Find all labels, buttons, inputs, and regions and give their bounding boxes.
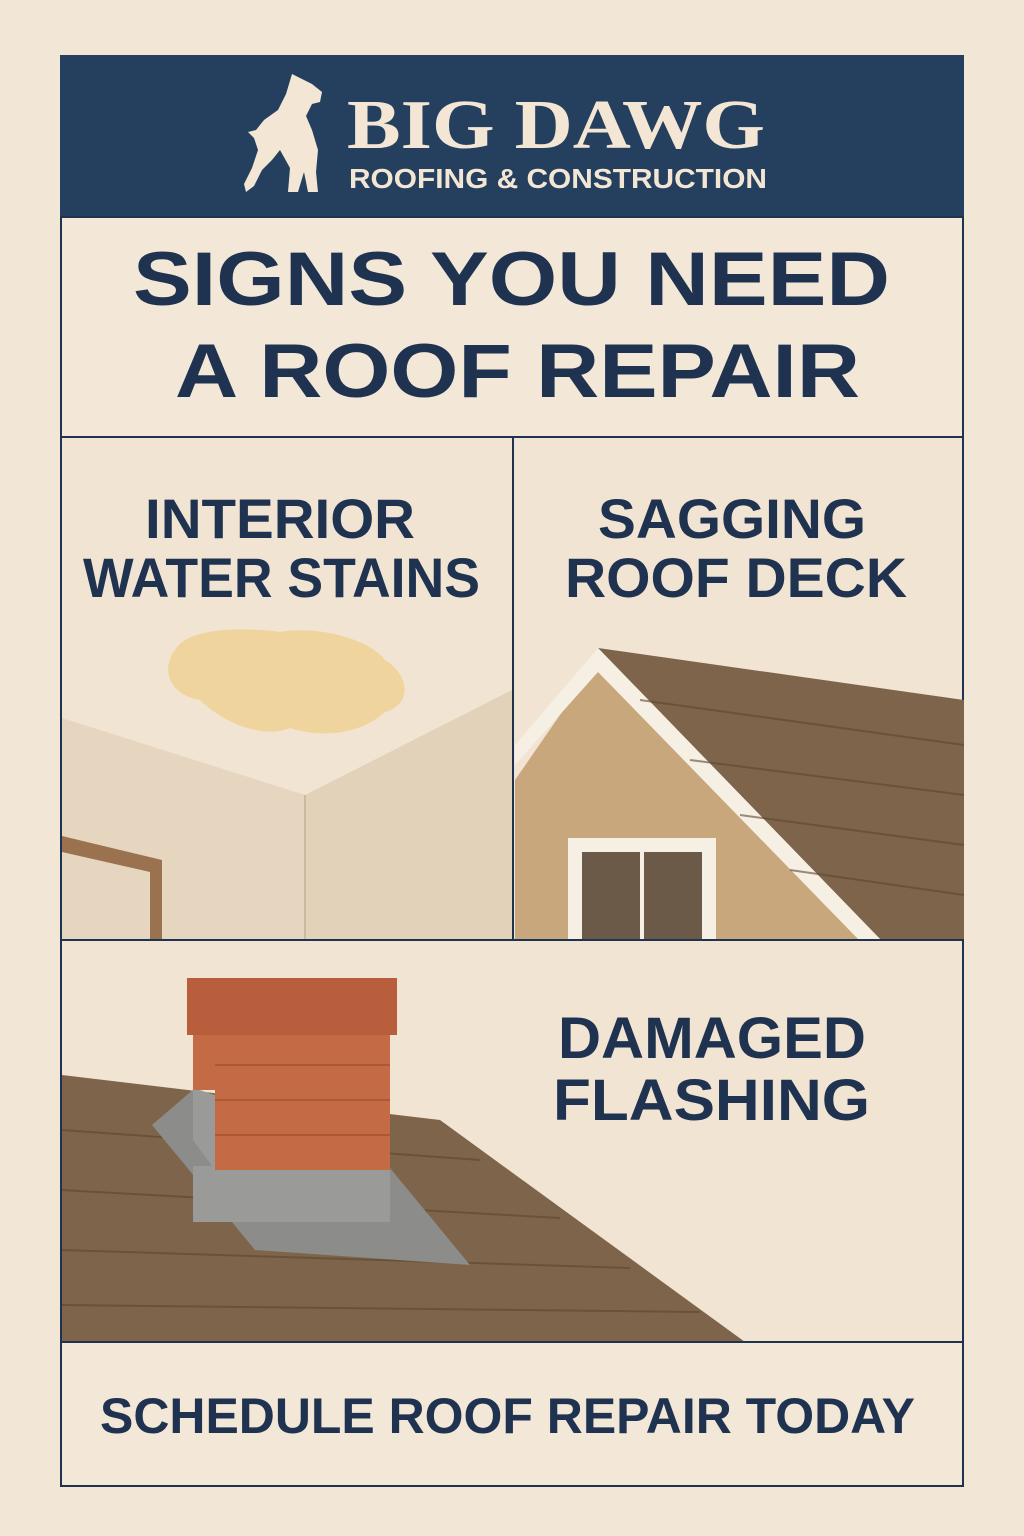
panel: damaged flashing — [61, 940, 963, 1342]
title panel: SIGNS YOU NEED — [133, 237, 890, 322]
call to action — [61, 1342, 963, 1486]
illustration: roof with chimney — [62, 978, 745, 1342]
icon: dog silhouette — [244, 74, 322, 192]
panel: interior water stains — [61, 437, 513, 940]
header banner: ROOFING & CONSTRUCTION — [349, 163, 767, 194]
panel: damaged flashing: FLASHING — [553, 1068, 870, 1133]
illustration: ceiling corner with stain — [62, 629, 512, 939]
header banner — [60, 55, 964, 217]
panel: sagging roof deck: SAGGING — [598, 487, 866, 550]
panel: interior water stains: INTERIOR — [145, 487, 415, 550]
panel: sagging roof deck: ROOF DECK — [565, 546, 907, 609]
logo text: BIG DAWG — [347, 87, 765, 164]
panel: damaged flashing: DAMAGED — [558, 1006, 866, 1071]
call to action: SCHEDULE ROOF REPAIR TODAY — [100, 1388, 915, 1444]
illustration: gable roof — [515, 648, 964, 939]
panel: sagging roof deck — [513, 437, 964, 940]
title panel — [61, 217, 963, 437]
panel: interior water stains: WATER STAINS — [83, 546, 480, 609]
title panel: A ROOF REPAIR — [175, 329, 860, 414]
